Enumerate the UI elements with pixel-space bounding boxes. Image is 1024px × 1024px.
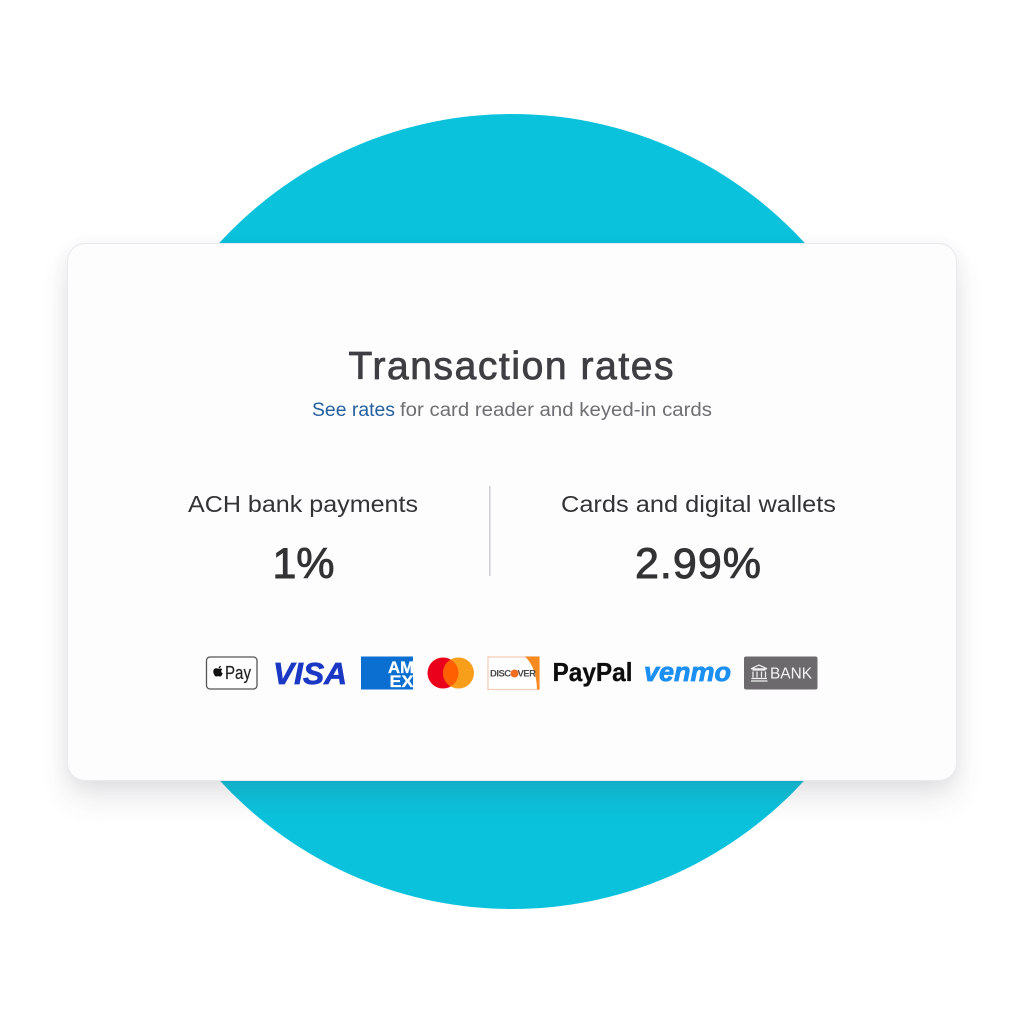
icon: Mastercard bbox=[428, 658, 474, 688]
panel: transaction rates card bbox=[67, 243, 957, 781]
icon: Discover bbox=[488, 656, 540, 690]
icon: Apple Pay: Pay bbox=[225, 663, 251, 683]
column: ACH bank payments: 1% bbox=[272, 540, 334, 588]
column: Cards and digital wallets bbox=[561, 491, 836, 588]
title: Transaction rates bbox=[348, 345, 674, 388]
teal background circle bbox=[115, 114, 909, 909]
column: ACH bank payments bbox=[188, 491, 418, 588]
subtitle with rates link: for card reader and keyed-in cards bbox=[400, 400, 712, 421]
icon: American Express: EX bbox=[390, 672, 414, 691]
subtitle with rates link: See rates bbox=[312, 400, 395, 421]
icon: Discover: DISCOVER bbox=[490, 668, 536, 680]
icon: Bank: BANK bbox=[770, 666, 813, 682]
icon: American Express bbox=[361, 656, 414, 691]
payment method logos bbox=[206, 656, 818, 691]
column: Cards and digital wallets: Cards and digital wallets bbox=[561, 491, 836, 517]
icon: American Express: AM bbox=[388, 658, 414, 677]
icon: Venmo: venmo bbox=[644, 657, 731, 687]
column: Cards and digital wallets: 2.99% bbox=[635, 540, 761, 588]
column: ACH bank payments: ACH bank payments bbox=[188, 491, 418, 517]
icon: Apple Pay bbox=[206, 657, 257, 689]
icon: Visa: VISA bbox=[273, 656, 347, 691]
icon: PayPal: PayPal bbox=[552, 657, 632, 687]
icon: Bank bbox=[744, 656, 818, 690]
